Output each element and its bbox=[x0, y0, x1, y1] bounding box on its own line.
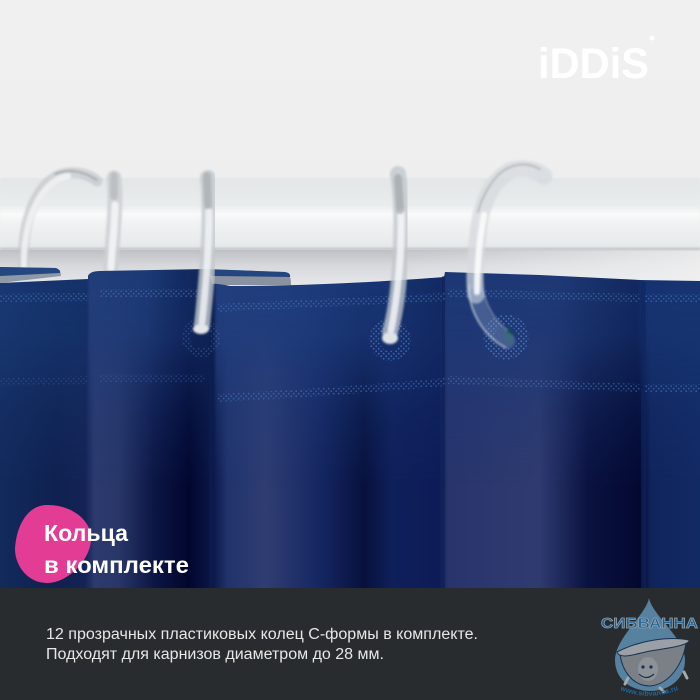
back rings behind curtain bbox=[23, 171, 115, 270]
watermark logo: Sibvanna bbox=[601, 598, 698, 696]
logo wordmark: СИБВАННА bbox=[601, 615, 698, 632]
heading bbox=[44, 520, 189, 578]
curtain back panels bbox=[0, 267, 291, 285]
description text: Подходят для карнизов диаметром до 28 мм. bbox=[46, 646, 384, 663]
curtain rod bbox=[0, 178, 700, 284]
description text bbox=[46, 626, 478, 663]
ring 4 bbox=[382, 174, 401, 344]
icon: water drop bbox=[615, 598, 685, 691]
grommet dots: ring 5 bbox=[489, 320, 523, 354]
bottom information panel bbox=[0, 588, 700, 700]
pink blob accent bbox=[15, 505, 91, 583]
icon: bathtub bbox=[617, 638, 689, 692]
stitched dot rows on curtain bbox=[0, 293, 700, 398]
ring 5: front hook bbox=[469, 164, 544, 348]
ring 1: far left hook bbox=[23, 171, 97, 270]
description text: 12 прозрачных пластиковых колец С-формы в комплекте. bbox=[46, 626, 478, 643]
heading: Кольца bbox=[44, 520, 128, 546]
heading: в комплекте bbox=[44, 552, 189, 578]
grommet dots: ring 3 bbox=[186, 323, 216, 353]
background wall bbox=[0, 0, 700, 300]
curtain body bbox=[0, 269, 700, 590]
brand logo: IDDIS: iDDiS bbox=[538, 40, 649, 88]
logo url: www.sibvanna.ru bbox=[620, 686, 678, 696]
ring 3 bbox=[193, 176, 210, 334]
grommet dots: ring 4 bbox=[374, 324, 406, 356]
ring 2: left straight bbox=[111, 176, 115, 268]
